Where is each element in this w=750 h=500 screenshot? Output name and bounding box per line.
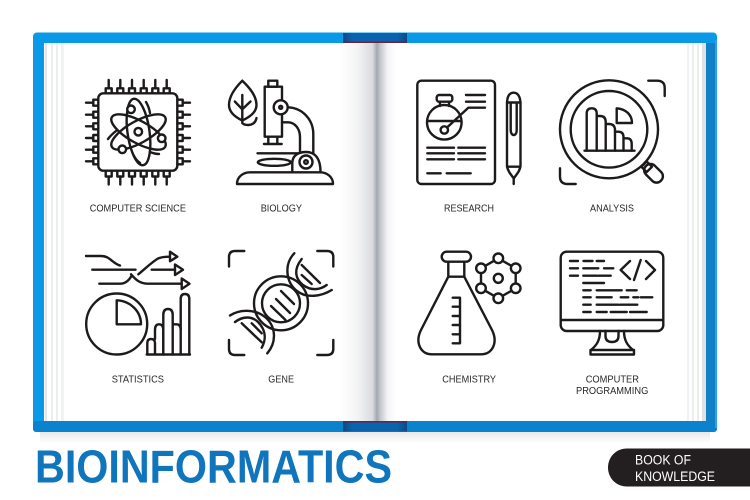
label: gene: GENE [268, 374, 294, 386]
label: chemistry: CHEMISTRY [442, 374, 496, 386]
icon: chemistry flask and molecule [418, 252, 520, 354]
icon: biology leaf and microscope [229, 81, 333, 184]
title: BIOINFORMATICS [35, 440, 392, 492]
label: computer programming: COMPUTER [586, 374, 639, 386]
spine gutter shadow [340, 43, 396, 421]
label: research: RESEARCH [444, 202, 494, 214]
icon: computer programming monitor [561, 252, 663, 354]
icon: analysis magnifier with chart [560, 80, 665, 185]
label: analysis: ANALYSIS [590, 202, 634, 214]
page edges left [44, 43, 66, 421]
icon: statistics pie, bars and arrows [86, 252, 190, 354]
icon: research paper and pen [417, 81, 520, 184]
spine band bottom [343, 421, 407, 432]
label: computer programming [576, 374, 648, 397]
label: statistics: STATISTICS [112, 374, 164, 386]
spine band top [343, 33, 407, 43]
badge: book of knowledge [608, 448, 750, 486]
badge: book of knowledge: BOOK OF [635, 452, 691, 468]
label: computer science: COMPUTER SCIENCE [90, 202, 186, 214]
book [33, 32, 717, 443]
icon: computer science chip with atom [86, 80, 190, 184]
book cover [33, 32, 717, 432]
label: computer programming: PROGRAMMING [576, 385, 648, 397]
drop shadow under book [40, 431, 710, 443]
label: biology: BIOLOGY [261, 202, 302, 214]
page left [65, 43, 377, 421]
badge: book of knowledge: KNOWLEDGE [635, 469, 715, 484]
page edges right [686, 43, 706, 421]
page right [377, 43, 687, 421]
icon: gene DNA helix [229, 251, 333, 355]
